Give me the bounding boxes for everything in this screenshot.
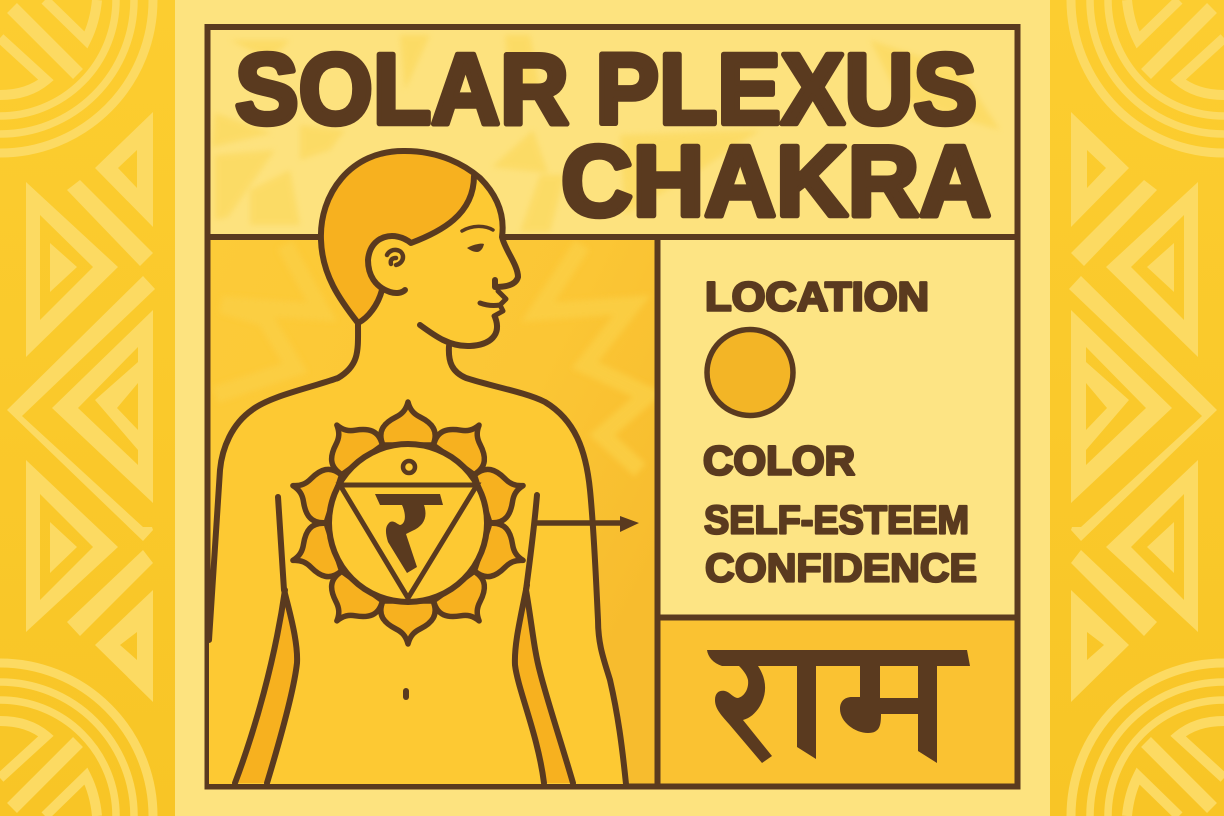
arrow to info panel xyxy=(537,516,639,532)
frame and dividers xyxy=(207,27,1018,786)
label: color: COLOR xyxy=(703,438,855,484)
title: SOLAR PLEXUS xyxy=(235,34,977,146)
torso outline, right xyxy=(449,346,626,784)
seed syllable symbol xyxy=(375,494,443,573)
inner ear xyxy=(387,250,403,265)
hairline and ear xyxy=(368,176,474,293)
arm gap, left xyxy=(235,590,297,783)
swatch: chakra colour circle xyxy=(707,330,793,416)
panel: figure background xyxy=(207,237,657,787)
icon: solar plexus chakra mandala xyxy=(285,402,531,644)
torso outline, left xyxy=(209,323,358,640)
left arm inner lines xyxy=(267,497,297,783)
panel: mantra background xyxy=(657,617,1018,787)
title xyxy=(235,34,991,238)
right border pattern xyxy=(1069,0,1224,816)
keywords: self-esteem and confidence: CONFIDENCE xyxy=(705,546,977,590)
bindu ring xyxy=(403,461,415,473)
eye xyxy=(467,244,484,252)
title: CHAKRA xyxy=(561,126,991,238)
panel: attributes background xyxy=(657,237,1018,617)
eyebrow xyxy=(462,226,493,231)
inverted triangle xyxy=(340,485,477,598)
panel: title background xyxy=(207,27,1018,237)
chin and jaw xyxy=(420,317,497,346)
label: location: LOCATION xyxy=(705,274,929,320)
hair fill xyxy=(321,151,474,323)
keywords: self-esteem and confidence: SELF-ESTEEM xyxy=(704,498,969,542)
petals xyxy=(285,402,531,644)
head outline xyxy=(321,151,518,323)
left border pattern xyxy=(0,0,155,816)
right arm inner lines xyxy=(526,495,573,783)
navel xyxy=(403,688,409,700)
keywords: self-esteem and confidence xyxy=(704,498,977,590)
lips xyxy=(480,291,506,316)
head fill xyxy=(321,151,518,346)
figure: human torso and head xyxy=(209,151,626,784)
arm gap, right xyxy=(516,590,573,783)
chakra circle xyxy=(329,444,487,602)
mantra: Devanagari word, drawn as a shape with the real text kept alongside xyxy=(707,650,970,763)
body fill xyxy=(209,200,626,784)
cream centre band xyxy=(175,0,1050,816)
